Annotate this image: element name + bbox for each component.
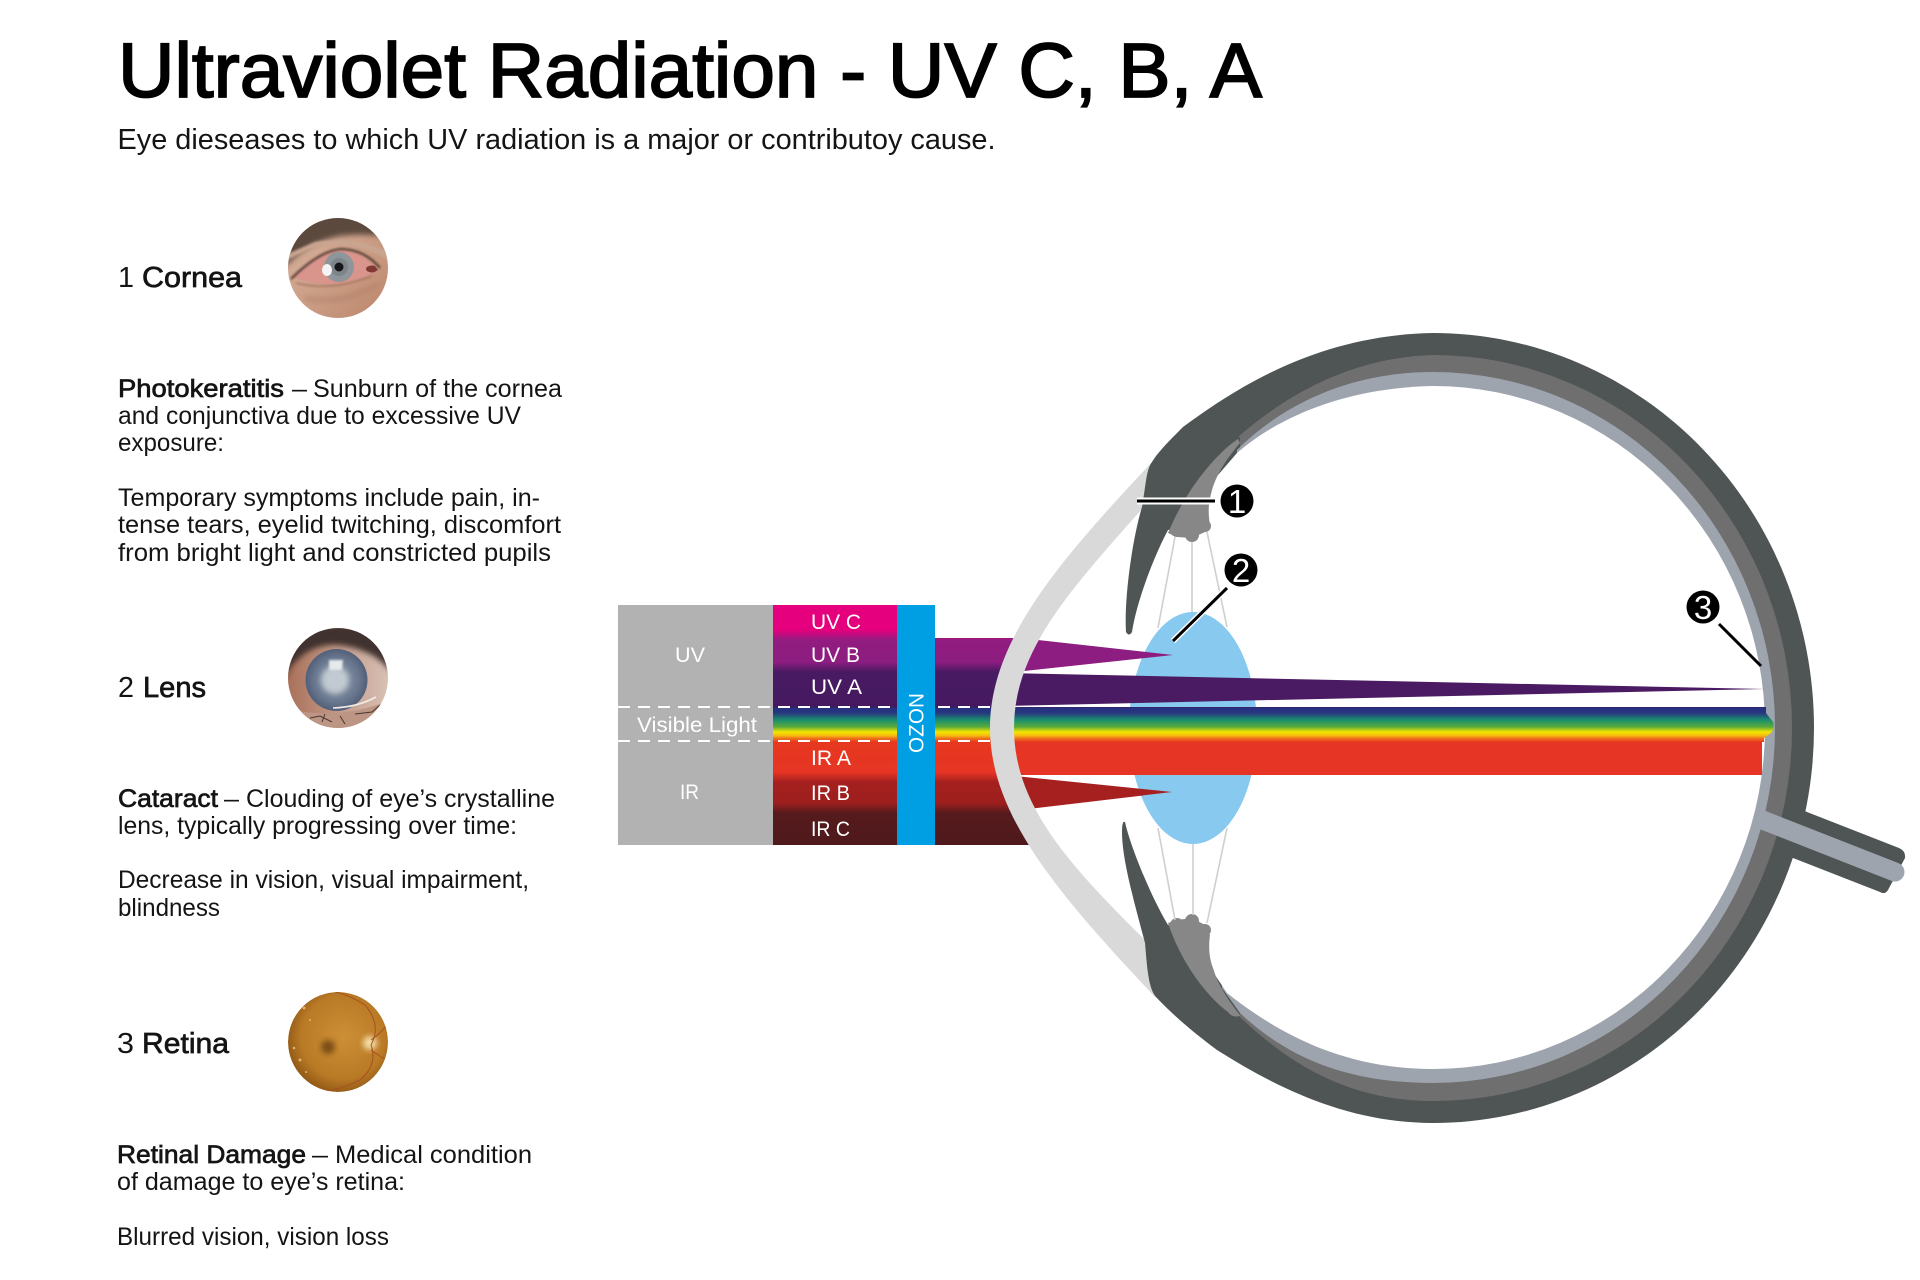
vitreous interior	[1205, 386, 1765, 1069]
callout 3: retina: 3	[1694, 589, 1712, 626]
body text: cataract	[118, 785, 555, 922]
body text: photokeratitis: and conjunctiva due to excessive UV	[118, 402, 521, 430]
callout 2: lens	[1173, 552, 1258, 641]
spectrum column	[773, 605, 897, 845]
UV B label: UV B	[811, 644, 860, 667]
heading: 2 Lens: 2	[118, 672, 134, 704]
body text: cataract: Clouding of eye’s crystalline	[246, 785, 555, 813]
body text: retinal damage: Retinal Damage	[117, 1141, 306, 1169]
photo: retina fundus	[288, 990, 392, 1092]
body text: photokeratitis: from bright light and constricted pupils	[118, 539, 551, 567]
gray category column	[618, 605, 773, 845]
body text: cataract: Decrease in vision, visual impairment,	[118, 866, 529, 894]
body text: retinal damage: –	[312, 1141, 328, 1169]
body text: cataract: lens, typically progressing over time:	[118, 812, 517, 840]
body text: retinal damage	[117, 1141, 532, 1251]
visible light label: Visible Light	[637, 714, 757, 737]
body text: photokeratitis: tense tears, eyelid twitching, discomfort	[118, 511, 561, 539]
ciliary body lower	[1168, 914, 1240, 1016]
body text: photokeratitis	[118, 375, 562, 567]
optic nerve	[1760, 819, 1895, 872]
photo: red irritated eye	[288, 218, 388, 318]
sclera	[1122, 333, 1814, 1123]
retina layer	[1222, 372, 1775, 1083]
callout 1: cornea	[1137, 483, 1254, 520]
title: Ultraviolet Radiation - UV C, B, A	[118, 28, 1263, 114]
body text: photokeratitis: exposure:	[118, 429, 224, 457]
crystalline lens	[1129, 612, 1257, 844]
ozone layer bar	[897, 605, 935, 845]
ozone label: OZON	[906, 693, 928, 753]
body text: cataract: –	[224, 785, 239, 813]
light beams inside the eye	[1005, 638, 1774, 810]
IR C label: IR C	[811, 818, 850, 841]
radiation spectrum panel	[618, 605, 990, 845]
photo: cataract eye	[288, 628, 388, 728]
callout 3: retina	[1686, 589, 1761, 666]
visible light beam	[1005, 707, 1774, 742]
callout 2: lens: 2	[1232, 552, 1250, 589]
heading: 1 Cornea: Cornea	[142, 262, 243, 294]
IR A beam	[1005, 742, 1762, 775]
heading: 2 Lens: Lens	[143, 672, 206, 704]
body text: photokeratitis: Sunburn of the cornea	[313, 375, 562, 403]
dashed visible-light boundaries	[618, 707, 990, 741]
heading: 3 Retina: 3	[117, 1028, 134, 1060]
body text: photokeratitis: –	[292, 375, 307, 403]
body text: retinal damage: of damage to eye’s retina:	[117, 1168, 405, 1196]
ciliary body upper	[1168, 439, 1240, 542]
light beams before the cornea	[935, 638, 1040, 845]
UV A beam reaches the retina	[1005, 673, 1765, 706]
IR A label: IR A	[811, 747, 851, 770]
section: lens	[118, 625, 555, 922]
body text: photokeratitis: Temporary symptoms include pain, in-	[118, 484, 540, 512]
cornea	[990, 460, 1156, 998]
IR B label: IR B	[811, 782, 850, 805]
UV B beam stops at the lens	[1024, 640, 1173, 671]
optic nerve sheath	[1770, 805, 1905, 893]
body text: retinal damage: Blurred vision, vision loss	[117, 1223, 389, 1251]
heading: 3 Retina: Retina	[142, 1028, 230, 1060]
eyeball	[1122, 333, 1905, 1123]
body text: retinal damage: Medical condition	[335, 1141, 532, 1169]
heading: 1 Cornea: 1	[118, 262, 134, 294]
UV A label: UV A	[811, 676, 862, 699]
subtitle: Eye dieseases to which UV radiation is a major or contributoy cause.	[118, 124, 996, 156]
IR label: IR	[680, 781, 699, 804]
body text: cataract: blindness	[118, 894, 220, 922]
section: cornea	[118, 210, 562, 567]
body text: photokeratitis: Photokeratitis	[118, 375, 284, 403]
choroid layer	[1238, 355, 1792, 1101]
section: retina	[117, 990, 532, 1251]
UV C label: UV C	[811, 611, 861, 634]
zonule fibres	[1158, 532, 1227, 923]
body text: cataract: Cataract	[118, 785, 218, 813]
UV label: UV	[675, 644, 705, 667]
callout 1: cornea: 1	[1228, 483, 1246, 520]
IR B beam stops at the lens	[1015, 776, 1172, 810]
